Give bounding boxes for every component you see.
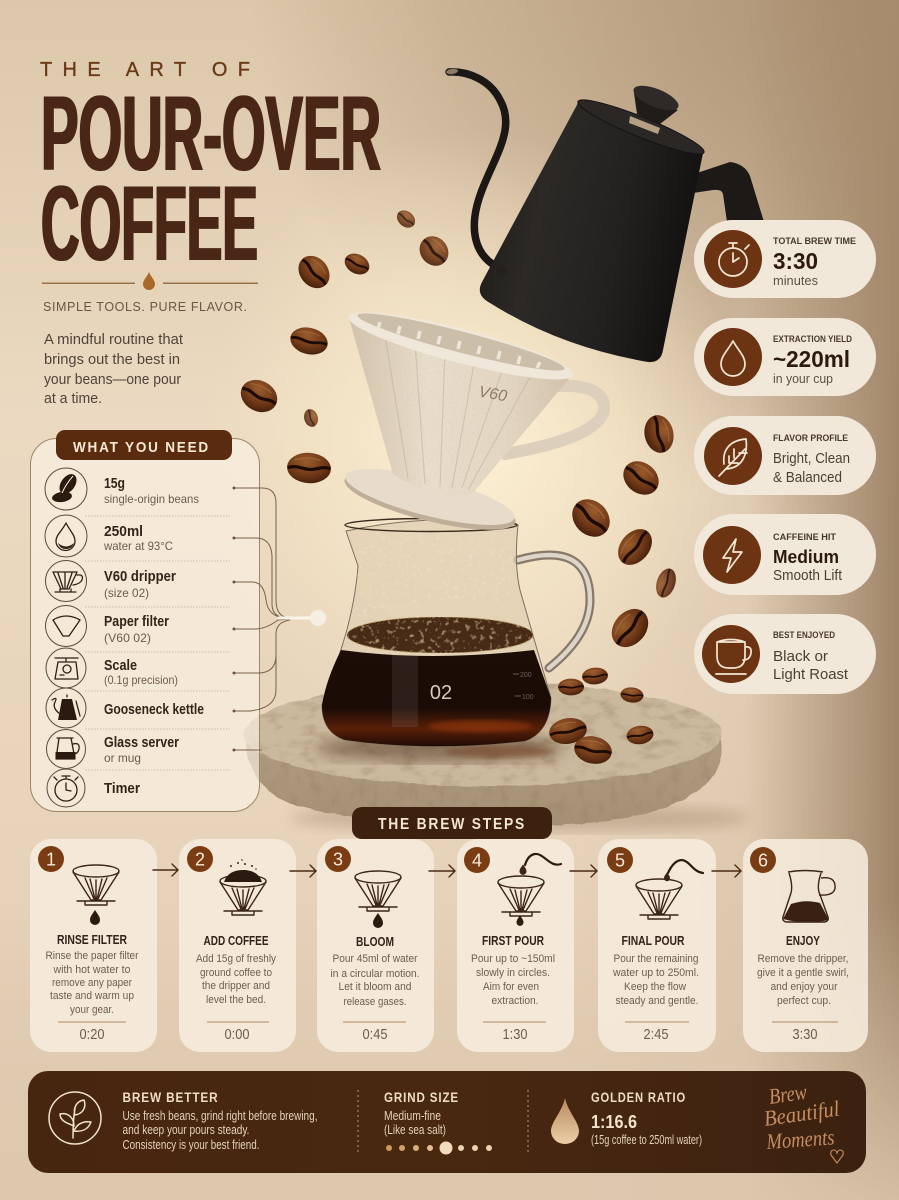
step 1: rinse filter: with hot water to [53,964,130,976]
brew steps heading: THE BREW STEPS [378,816,526,833]
step 2: add coffee: the dripper and [202,980,270,992]
pill: caffeine hit: Smooth Lift [773,567,843,584]
step 4: first pour: 1:30 [502,1027,528,1043]
step 1: rinse filter: taste and warm up [50,990,134,1002]
title block [40,59,381,407]
step 6: enjoy: Remove the dripper, [758,953,848,965]
V60 dripper [340,300,604,542]
golden ratio [591,1090,702,1147]
step 1: rinse filter [30,839,157,1052]
brew steps row [30,839,868,1052]
tip: brew better [122,1090,318,1152]
glass highlight [392,655,418,727]
step 3: bloom: Let it bloom and [338,981,412,993]
golden ratio: GOLDEN RATIO [591,1090,686,1105]
item: water [45,515,173,557]
step 1: rinse filter: your gear. [70,1004,114,1016]
kettle knob [629,81,682,134]
item: scale [46,648,178,688]
step 4: first pour: 4 [472,850,482,870]
step 2: add coffee: 2 [195,850,205,870]
script sign-off: Brew [767,1079,809,1109]
dripper saucer [340,458,520,542]
icon: golden drop [551,1098,579,1144]
tip: brew better: and keep your pours steady. [122,1123,250,1137]
step 3: bloom: in a circular motion. [330,968,420,980]
dripper V60 mark: V60 [477,384,508,405]
step 4: first pour: slowly in circles. [476,967,550,979]
coffee foam [347,617,533,653]
panel frame [30,438,260,812]
item: glass server: or mug [104,751,141,765]
pill: caffeine hit: CAFFEINE HIT [773,532,836,543]
script sign-off: Moments [765,1124,835,1154]
step 6: enjoy: give it a gentle swirl, [757,967,849,979]
step 6: enjoy: 3:30 [792,1027,818,1043]
step 3: bloom [317,839,434,1052]
step 5: final pour: Keep the flow [624,981,686,993]
step 5: final pour: water up to 250ml. [612,967,699,979]
server rim [345,518,517,532]
stat pills [694,220,876,694]
item: scale: Scale [104,658,137,674]
pill: extraction yield [694,318,876,396]
intro paragraph [44,332,183,407]
pill: caffeine hit [694,514,876,595]
step 6: enjoy [743,839,868,1052]
brew steps heading [352,807,552,839]
step 3: bloom: 3 [333,850,343,870]
step 2: add coffee: Add 15g of freshly [196,953,276,965]
stone pedestal [244,682,750,832]
pill: total brew time [694,220,876,298]
server measures: 100 [522,694,534,701]
golden ratio: (15g coffee to 250ml water) [591,1133,702,1147]
intro paragraph: brings out the best in [44,352,180,368]
step 6: enjoy: 6 [758,850,768,870]
kettle body [480,103,703,362]
grind size: (Like sea salt) [384,1123,446,1137]
step 4: first pour [457,839,574,1052]
gooseneck kettle [446,68,764,362]
brew better band [28,1071,866,1173]
kettle lid [574,92,708,162]
step 1: rinse filter: remove any paper [52,977,132,989]
pill: extraction yield: EXTRACTION YIELD [773,334,852,345]
glass server [322,518,590,746]
main title line 1: POUR-OVER [41,73,381,193]
pill: caffeine hit: Medium [773,547,839,567]
step 3: bloom: BLOOM [356,934,394,949]
kettle spout [449,72,506,270]
step 3: bloom: 0:45 [362,1027,388,1043]
intro paragraph: A mindful routine that [44,332,183,348]
grind size: GRIND SIZE [384,1090,459,1105]
step 5: final pour: Pour the remaining [614,953,698,965]
step 5: final pour [598,839,716,1052]
item: beans: 15g [104,476,125,492]
item: water: 250ml [104,524,143,540]
item: timer [47,769,140,807]
item: beans [45,468,199,510]
server measures: 200 [520,672,532,679]
item: scale: (0.1g precision) [104,673,178,687]
step 5: final pour: steady and gentle. [616,995,698,1007]
dripper handle [505,386,604,454]
step 1: rinse filter: Rinse the paper filter [46,950,139,962]
step 1: rinse filter: 0:20 [80,1027,104,1043]
item: water: water at 93°C [103,539,173,553]
script sign-off [762,1079,843,1163]
main title line 2: COFFEE [41,163,258,283]
item: paper filter: (V60 02) [104,631,151,645]
panel: what you need [30,430,326,812]
panel heading: WHAT YOU NEED [73,439,210,456]
step arrows [153,864,741,877]
step 1: rinse filter: 1 [46,850,56,870]
panel heading [56,430,232,460]
step 5: final pour: 2:45 [644,1027,668,1043]
step 4: first pour: Pour up to ~150ml [471,953,555,965]
intro paragraph: at a time. [44,391,102,407]
golden ratio: 1:16.6 [591,1112,637,1132]
pill: extraction yield: ~220ml [773,346,850,372]
pill: best enjoyed: Black or [773,648,828,665]
grind size [384,1090,492,1154]
step 6: enjoy: and enjoy your [770,981,838,993]
floating beans [235,207,679,654]
connector lines [232,486,326,752]
step 2: add coffee [179,839,296,1052]
tagline: SIMPLE TOOLS. PURE FLAVOR. [43,300,247,314]
step 5: final pour: FINAL POUR [622,933,685,948]
step 3: bloom: release gases. [344,996,406,1008]
pill: flavor profile: & Balanced [773,469,842,486]
item: V60 dripper [46,560,176,602]
pill: flavor profile: Bright, Clean [773,450,850,467]
pill: total brew time: minutes [773,273,818,288]
divider with drop [42,272,258,290]
kicker: the art of: THE ART OF [40,59,250,81]
step 6: enjoy: ENJOY [786,933,820,948]
step 2: add coffee: level the bed. [206,994,266,1006]
beans on stone [547,667,655,767]
step 4: first pour: FIRST POUR [482,933,544,948]
step 6: enjoy: perfect cup. [777,995,831,1007]
intro paragraph: your beans—one pour [44,372,181,388]
step 5: final pour: 5 [615,850,625,870]
server number 02: 02 [430,682,452,704]
item: gooseneck kettle [46,688,204,728]
pill: best enjoyed: BEST ENJOYED [773,630,835,641]
grind scale dots [386,1142,492,1154]
item: timer: Timer [104,781,140,797]
item: glass server: Glass server [104,735,179,751]
step 4: first pour: extraction. [492,995,538,1007]
tip: brew better: Consistency is your best friend. [122,1138,260,1152]
tip: brew better: Use fresh beans, grind right before brewing, [122,1109,318,1123]
script sign-off: Beautiful [762,1096,841,1131]
item: V60 dripper: (size 02) [104,586,149,600]
dripper cone [349,318,573,495]
kettle handle [693,162,764,222]
step 2: add coffee: ground coffee to [200,967,272,979]
step 4: first pour: Aim for even [483,981,539,993]
step 2: add coffee: ADD COFFEE [204,933,269,948]
item: V60 dripper: V60 dripper [104,569,176,585]
step 3: bloom: Pour 45ml of water [332,953,418,965]
server measures [513,672,534,701]
item: paper filter [46,606,169,646]
step 2: add coffee: 0:00 [224,1027,250,1043]
server glass [322,520,551,746]
item: beans: single-origin beans [104,492,199,506]
pill: flavor profile: FLAVOR PROFILE [773,433,848,444]
step 1: rinse filter: RINSE FILTER [57,932,127,947]
dripper rim [344,300,578,392]
pill: total brew time: TOTAL BREW TIME [773,236,856,247]
brewed coffee [322,650,551,746]
pill: flavor profile [694,416,876,495]
item: glass server [46,730,179,768]
icon: leaf sprig [49,1092,101,1144]
item: paper filter: Paper filter [104,614,169,630]
server handle [518,555,590,668]
tip: brew better: BREW BETTER [122,1090,218,1105]
item: gooseneck kettle: Gooseneck kettle [104,702,204,718]
grind size: Medium-fine [384,1109,441,1123]
pill: total brew time: 3:30 [773,248,818,274]
pill: best enjoyed [694,614,876,694]
pill: best enjoyed: Light Roast [773,666,849,683]
pill: extraction yield: in your cup [773,371,833,386]
